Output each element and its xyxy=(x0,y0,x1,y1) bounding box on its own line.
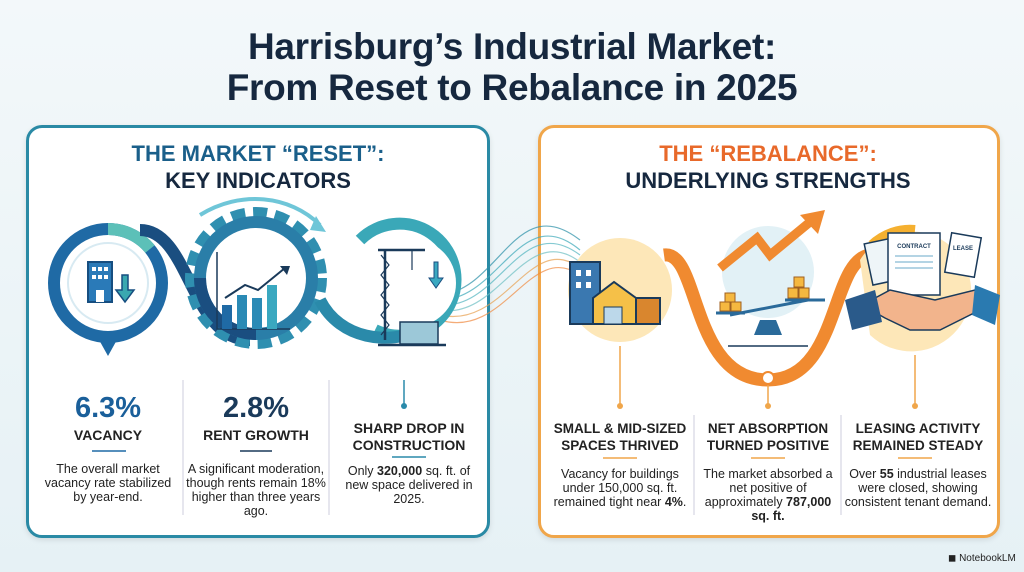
title xyxy=(227,26,797,108)
dividers xyxy=(183,380,841,515)
stat: leasing xyxy=(845,421,991,509)
panel: market reset xyxy=(26,125,490,538)
panel: rebalance xyxy=(538,125,1000,538)
heading: rebalance: UNDERLYING STRENGTHS xyxy=(625,168,911,193)
heading: reset: THE MARKET “RESET”: xyxy=(132,141,384,166)
connector orange arcs xyxy=(664,255,870,380)
icon: handshake with lease: CONTRACT xyxy=(897,244,931,250)
stat: construction: SHARP DROP IN xyxy=(354,420,464,436)
heading: rebalance: THE “REBALANCE”: xyxy=(659,141,877,166)
icon: construction circle xyxy=(320,224,456,409)
stat: vacancy: VACANCY xyxy=(74,427,142,443)
icon: absorption scale xyxy=(716,210,825,409)
icon: handshake with lease xyxy=(845,230,1000,409)
stat: rent growth: RENT GROWTH xyxy=(203,427,309,443)
stat: rent growth: 2.8% xyxy=(223,392,289,424)
connector arc xyxy=(140,230,250,340)
stat: leasing: Over 55 industrial leases were closed, showing consistent tenant demand. xyxy=(845,467,991,509)
stat: rent growth: A significant moderation, though rents remain 18% higher than three years ago. xyxy=(186,462,326,518)
title: Harrisburg’s Industrial Market: xyxy=(248,26,776,67)
stat: vacancy xyxy=(44,392,171,504)
heading: rebalance xyxy=(625,141,911,193)
flowing ribbon connecting panels xyxy=(440,226,580,323)
icon: buildings xyxy=(568,238,672,409)
title: From Reset to Rebalance in 2025 xyxy=(227,67,797,108)
stat: small spaces xyxy=(554,421,686,509)
watermark: ◼ NotebookLM xyxy=(948,553,1016,564)
stat: leasing: LEASING ACTIVITY xyxy=(856,421,980,436)
heading: reset xyxy=(132,141,384,193)
stat: rent growth xyxy=(186,392,326,518)
stat: construction: CONSTRUCTION xyxy=(353,437,465,453)
stat: construction xyxy=(345,420,473,506)
icon: vacancy circle xyxy=(54,229,162,356)
stat: vacancy: The overall market vacancy rate stabilized by year-end. xyxy=(45,462,171,504)
stat: net absorption xyxy=(703,421,833,523)
heading: reset: KEY INDICATORS xyxy=(165,168,351,193)
stat: net absorption: NET ABSORPTION xyxy=(708,421,828,436)
stat: small spaces: SMALL & MID-SIZED xyxy=(554,421,686,436)
stat: small spaces: SPACES THRIVED xyxy=(561,438,679,453)
icon: gear with chart xyxy=(190,199,326,344)
stat: leasing: REMAINED STEADY xyxy=(853,438,983,453)
stat: net absorption: The market absorbed a net positive of approximately 787,000 sq. ft. xyxy=(703,467,833,523)
stat: net absorption: TURNED POSITIVE xyxy=(707,438,829,453)
stat: small spaces: Vacancy for buildings under 150,000 sq. ft. remained tight near 4%. xyxy=(554,467,686,509)
stat: vacancy: 6.3% xyxy=(75,392,141,424)
icon: handshake with lease: LEASE xyxy=(953,246,973,252)
stat: construction: Only 320,000 sq. ft. of new space delivered in 2025. xyxy=(345,464,473,506)
